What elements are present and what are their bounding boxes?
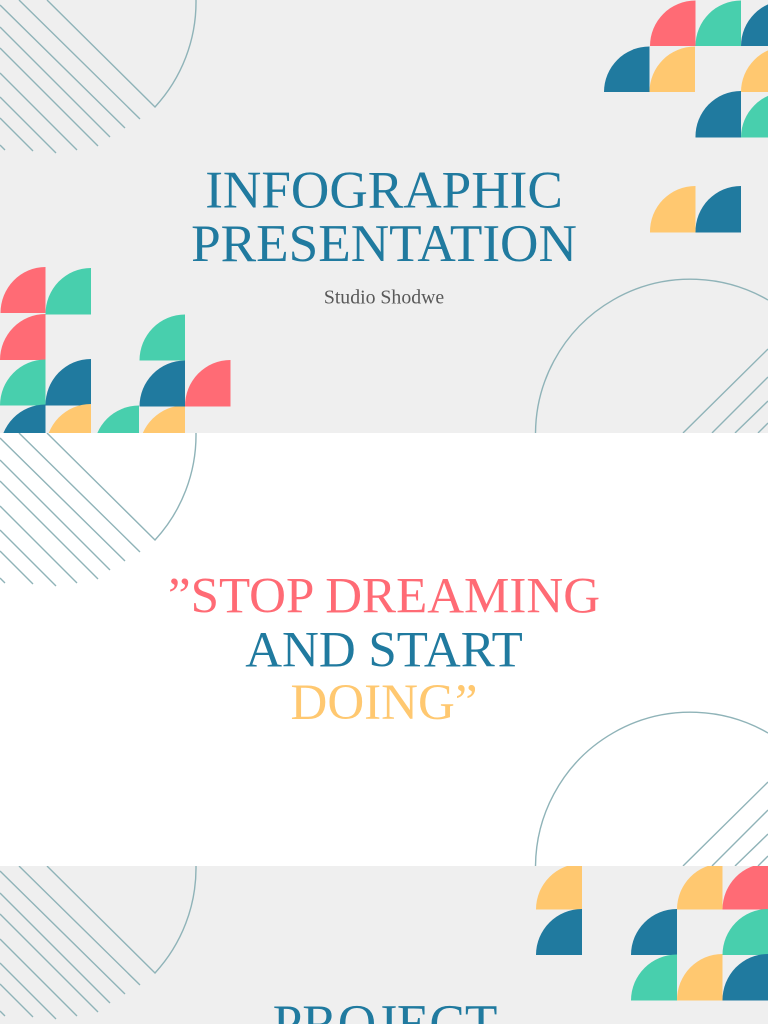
decoration: top-left circle with diagonal lines bbox=[0, 0, 196, 153]
title: infographic presentation: PRESENTATION bbox=[191, 214, 577, 273]
decoration: bottom-right circle with diagonal lines bbox=[536, 712, 768, 866]
decoration: top-left circle with diagonal lines bbox=[0, 433, 196, 586]
decoration: bottom-right circle with diagonal lines bbox=[536, 279, 768, 433]
decoration: top-right quarter-circle tiles bbox=[604, 0, 768, 138]
panel: slide 2 quote bbox=[0, 433, 768, 866]
decoration: top-left circle with diagonal lines bbox=[0, 866, 196, 1019]
quote text: ”STOP DREAMING bbox=[168, 569, 600, 625]
quote text: AND START bbox=[245, 623, 523, 679]
panel: slide 1 title bbox=[0, 0, 768, 451]
quote text: DOING” bbox=[291, 675, 477, 731]
title: infographic presentation bbox=[192, 172, 576, 262]
decoration: right-side tile pair bbox=[650, 186, 741, 232]
subtitle: studio name: Studio Shodwe bbox=[324, 286, 444, 308]
quote text bbox=[170, 578, 598, 720]
decoration: bottom-left quarter-circle tiles bbox=[0, 267, 230, 451]
decoration: right quarter-circle tiles bbox=[631, 864, 768, 1000]
title: infographic presentation: INFOGRAPHIC bbox=[205, 160, 563, 220]
decoration: center tile stack bbox=[536, 864, 582, 955]
panel: slide 3 project bbox=[0, 864, 768, 1024]
